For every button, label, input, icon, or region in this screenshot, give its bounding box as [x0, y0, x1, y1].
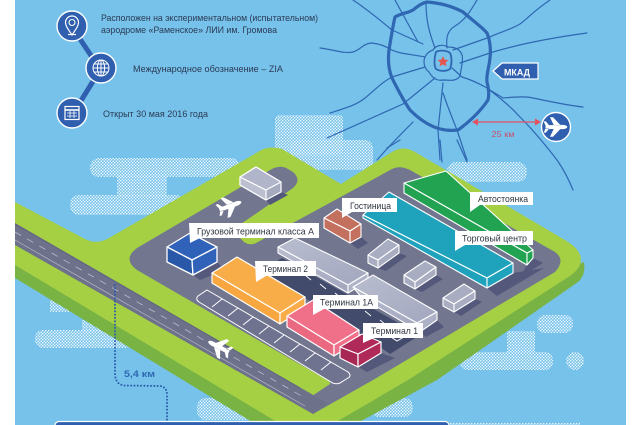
building: shopping centre [363, 192, 513, 288]
label: hotel [342, 198, 397, 218]
MKAD ring [388, 2, 490, 130]
distance arrow 25 km [472, 118, 541, 139]
label: cargo terminal [189, 223, 319, 243]
airport platform [15, 148, 584, 425]
label: terminal 2 [255, 261, 316, 282]
platform top [15, 148, 581, 425]
building: terminal 2 [212, 257, 305, 324]
timeline connectors [74, 33, 100, 112]
building: grey terminal right [353, 275, 437, 332]
bottom banner [55, 422, 449, 425]
dotted clouds [35, 115, 584, 425]
label: terminal 1: Терминал 1 [371, 326, 418, 337]
icon: globe [86, 53, 116, 83]
small parking outline [385, 333, 409, 341]
radial roads [320, 0, 587, 190]
small grey building 3 [443, 284, 475, 312]
MKAD label: МКАД [504, 68, 531, 78]
label: terminal 1A: Терминал 1А [320, 298, 374, 308]
text: location: Расположен на экспериментальном (испытательном) [101, 13, 318, 24]
building: grey cargo shed [240, 167, 281, 200]
label: hotel: Гостиница [350, 201, 392, 212]
building: grey long terminal [278, 238, 368, 293]
label: shopping centre [455, 231, 533, 251]
text: location [101, 13, 318, 36]
runway [15, 223, 327, 414]
distance label 5,4 km: 5,4 км [124, 369, 155, 380]
icon: plane on runway [204, 332, 235, 362]
MKAD label [493, 63, 538, 79]
icon: Moscow centre star [438, 56, 448, 66]
text: opening date: Открыт 30 мая 2016 года [103, 109, 209, 120]
label: shopping centre: Торговый центр [462, 234, 527, 244]
building: hotel [324, 209, 361, 243]
building shadows [193, 192, 544, 372]
apron gate area [262, 258, 420, 354]
label: cargo terminal: Грузовой терминал класса А [197, 226, 315, 238]
label: terminal 1A [313, 295, 378, 315]
icon: plane on apron [214, 192, 245, 220]
text: international code: Международное обозначение – ZIA [133, 64, 284, 75]
small grey building 1 [368, 239, 399, 268]
small grey building 2 [404, 261, 436, 289]
building: car park [404, 171, 533, 265]
label: car park [470, 192, 533, 212]
building: cargo terminal A [167, 233, 217, 275]
label: terminal 1 [363, 323, 423, 343]
parking grid [197, 290, 350, 384]
building: terminal 1A [287, 300, 359, 356]
label: car park: Автостоянка [478, 194, 529, 205]
building: terminal 1 [340, 334, 381, 367]
platform side [15, 262, 584, 425]
apron [130, 167, 560, 414]
text: location: аэродроме «Раменское» ЛИИ им. Громова [101, 25, 278, 36]
icon: airport plane badge [542, 112, 570, 142]
map of Moscow roads [320, 0, 587, 190]
icon: location pin [57, 11, 87, 41]
dotted distance line [115, 285, 167, 421]
label: terminal 2: Терминал 2 [263, 264, 308, 275]
distance arrow 25 km: 25 км [492, 129, 515, 139]
icon: calendar [57, 98, 87, 128]
